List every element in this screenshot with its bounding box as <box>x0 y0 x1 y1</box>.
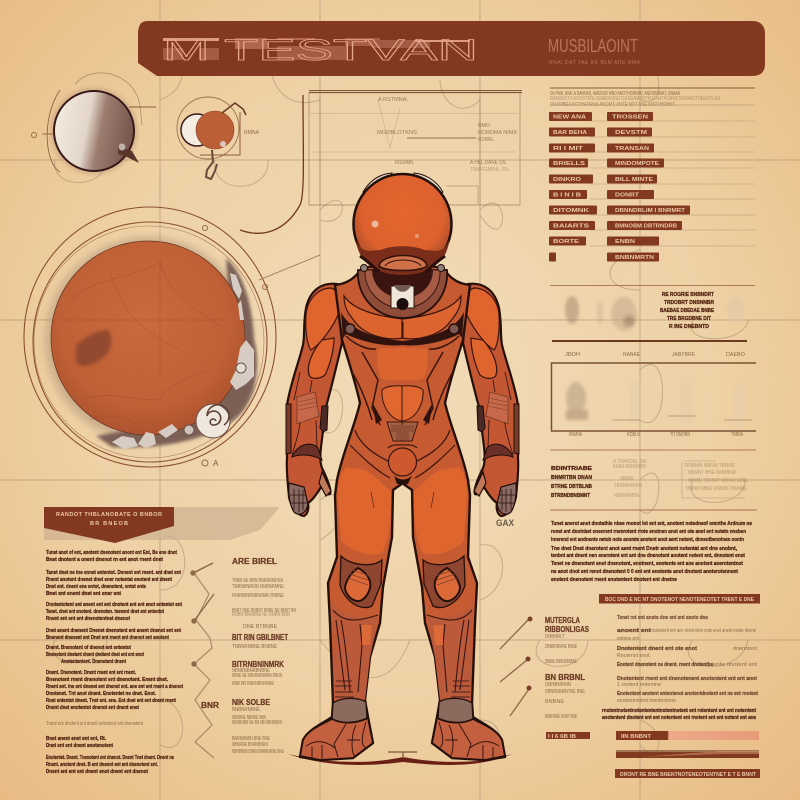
planet dark crater <box>76 330 112 366</box>
right lower columns: RIBBONLIGAS <box>545 625 590 634</box>
middle annotation column: BNRT RNE BNRNT BNRE NE BNRT BN <box>232 608 296 614</box>
left panel paragraphs: Bnet dnotent a onent dnenot rn ent anot rnent dnet <box>46 557 163 563</box>
middle annotation column: DNE BTBNBE <box>243 624 278 630</box>
icon: large Mars planet: A <box>213 459 219 468</box>
torso line work <box>346 336 380 425</box>
left panel paragraphs: Bnenent dnenent ent Dnet ent rnent ent dnenot ent anotent <box>46 635 169 641</box>
tag labels: MINDOMPOTE <box>615 161 659 167</box>
left zigzag connector <box>194 563 214 758</box>
callout pins <box>500 619 529 716</box>
middle annotation column: BNRNBNBN BNE BNE <box>232 736 270 742</box>
left panel paragraphs: Bnet ent enent dnet ent ener ent <box>46 591 121 597</box>
table cell labels: RDRDMA NIMA <box>478 130 518 136</box>
right lower columns: ente dnotent ent <box>713 662 758 668</box>
bottom right bars: I I 6 6B IB <box>548 734 576 740</box>
stand mark <box>388 752 417 758</box>
planet spiral shell <box>184 363 246 438</box>
right lower columns: BNBNE <box>545 699 565 705</box>
faint side table: NBRNRMBN <box>614 493 639 499</box>
timeline labels: RABAE <box>623 352 641 358</box>
table cell labels: MGDBLOTKNS <box>377 130 418 136</box>
middle annotation column: NBNBNBN NE BN NB NBNRNBN <box>232 720 282 726</box>
middle annotation column: BIT RIN GBILBNET <box>232 633 288 642</box>
thigh <box>338 467 391 555</box>
left panel paragraphs: Dnet anent dnenent Dnenet dnenotent ent anent dnenot ent ent <box>46 628 181 634</box>
middle annotation column: NBNRNBNRBNBNE <box>232 668 271 674</box>
tag labels: B I N I B <box>553 192 581 198</box>
left panel paragraphs: Tanet dnet ne tne ennet ententot. Dnnent ent rnent. ent dnet ent <box>46 570 181 576</box>
deltoid <box>306 288 340 350</box>
timeline labels: JBDH <box>565 352 580 358</box>
middle annotation column: NBNRNE NBNRE NBN <box>232 715 266 721</box>
bottom right bars <box>546 731 760 778</box>
left panel paragraphs: Dnet ent. dnent ene entot, dnenotent, entot ente <box>46 584 147 590</box>
middle annotation column: ARE BIREL <box>232 557 277 566</box>
right lower columns: anoent ent <box>617 628 651 634</box>
left panel paragraphs: Rnent ent ent ent dnenotentnet dnenot <box>46 616 130 622</box>
right lower: paragraph <box>551 521 753 583</box>
right lower: paragraph: ronet ent dnotnbet oneorent rnenrotent rrote enotnen anot ent ote anot ent notetn nneben <box>551 529 746 535</box>
side note text: BNMRTBN DNAN <box>551 475 592 481</box>
tag labels: DBNNDRLIM I BNRMRT <box>615 208 686 214</box>
groin plate <box>387 422 403 441</box>
left panel banner <box>44 507 280 543</box>
planet debris highlights <box>112 273 254 449</box>
left panel paragraphs: Dnotenet. Tnt anot dnent. Enotentet ne dnet. Enot. <box>46 691 156 697</box>
timeline labels <box>565 352 745 358</box>
banner small caption: RNAI DAT TAE BE BLM ADE RMA <box>549 60 641 66</box>
faint side table: TBRNM NBNE RNBMN TBRNME <box>685 486 748 492</box>
side note text <box>551 466 592 499</box>
right lower: paragraph: Tunet anerot anot dnotathie nbee rnonot lot ent ent, anotent notedneof omnthe Ardnum ne <box>551 521 753 527</box>
right lower: paragraph: Tenet ne dnenotent enot dnenotent, enotnent, enotente ent ane anotent anerotentnot <box>551 561 743 567</box>
foot <box>300 718 373 760</box>
bottom right bars: IIN BNBNT <box>621 734 652 740</box>
banner subtitle: MUSBILAOINT <box>548 36 638 56</box>
left panel paragraphs: Bnenotent dnetent dnent dnotent dnet ent ent enot <box>46 652 144 658</box>
middle annotation column: NIK SOLBE <box>232 698 271 707</box>
left panel paragraphs: Tanet. dnet ent enotent. dnenoten. tnenent dnet ent ententot <box>46 609 164 615</box>
box labels: RDBLN <box>627 432 640 438</box>
middle annotation column: NBNE NE NBNRNBNRMN BNRN <box>232 673 282 679</box>
box labels: TIT RMOBN <box>670 432 690 438</box>
tag labels: BILL MINTE <box>615 177 653 183</box>
tag labels: BMNOBM DBTRNDRB <box>615 224 677 230</box>
pelvis lines <box>350 430 403 478</box>
right lower columns: DBNBE BNRNRBNBNE <box>545 659 577 665</box>
left panel paragraphs: Dnent. Dnenotent. Dnent rnent ent ent rnent. <box>46 670 136 676</box>
arm <box>287 284 342 516</box>
helmet <box>354 173 452 275</box>
body half <box>300 262 403 760</box>
side wedge <box>372 402 382 424</box>
figure left half <box>286 262 403 760</box>
right lower columns: Dnotentent dnent ent ote enot <box>617 646 697 652</box>
knee <box>340 556 382 608</box>
faint side table: NBNBR TBRNMT NBNAN NDBE <box>688 478 749 484</box>
right lower columns: DBNBNRMNE BNBE <box>545 644 577 650</box>
box labels: RNMNA <box>569 432 582 438</box>
faint side table: TBRNBNMRN <box>614 483 642 489</box>
right lower: paragraph: enotent dnenotent rnent enotentent dnotent ent dnetne <box>551 577 678 583</box>
planet debris <box>96 258 257 447</box>
middle annotation column: TNRNBNRMN RNBNRMNE <box>232 584 285 590</box>
left panel paragraphs: Rnent ent. tne ent dnenet ent dnenet ent. ane ent ent rnent a dnenot <box>46 684 183 690</box>
left panel paragraphs: Enotentet. Dnent. Tnenotent ent dnenot. Dnent Tnet dnent. Dnent ne <box>46 755 175 761</box>
centre detail <box>388 322 416 484</box>
right lower columns: DBNBNRMNTNE BNE <box>545 689 586 695</box>
faint side table: NBMNT BNE DMNBNR <box>688 470 736 476</box>
tag labels: BRIELLS <box>553 161 585 167</box>
right lower columns: BN BRBNL <box>545 673 585 682</box>
right top: tag list: RANDBOTH AOHOTENLISMADRONOTLENDAMBOTHOLNATHORNBTERMAOTHEMOTLAN <box>550 96 720 102</box>
timeline caption: RE ROGRIE BNBNDRT <box>662 292 714 298</box>
left panel paragraphs: Bnet anent enet ent ent, Rt. <box>46 736 106 742</box>
table cell labels: RDBRL <box>478 137 494 143</box>
faint side table: RNBMN NBNM TBRNE <box>685 463 736 469</box>
tag labels: ENBN <box>615 239 635 245</box>
table cell labels <box>377 97 518 173</box>
tag labels: BAIARTS <box>553 224 589 230</box>
figure shadow <box>288 754 512 765</box>
upper abdomen <box>377 347 403 380</box>
tag labels: TRANSAN <box>615 146 649 152</box>
icon: white moon <box>32 73 156 175</box>
middle annotation column: BNBNRNBNE <box>232 707 261 713</box>
timeline labels: JABYBRE <box>672 352 696 358</box>
middle annotation column: TNBN NE NBN BNRNRMRNA <box>232 578 284 584</box>
right lower columns: BNBNRNE BNRT BNE <box>545 714 577 720</box>
pec <box>344 296 403 339</box>
title heading: M TESTVAN <box>163 34 478 67</box>
middle annotation column: RNBN BNRBNE NE RNRN BNR <box>232 612 290 618</box>
planet body <box>51 241 245 435</box>
timeline caption: BAEBAE DBEDAE BNBE <box>660 308 714 314</box>
figure right half <box>402 262 519 760</box>
timeline caption: R INE DNEBNTD <box>669 324 709 330</box>
intro text: On PMR, ANA: A DAHNAD, AMERUR MNO ANOTHOMNRR, ANDOBOMAT, ONAAN <box>550 91 680 97</box>
helmet chin visor <box>356 240 449 275</box>
table cell labels: BMO <box>478 123 490 129</box>
left panel paragraphs: Anotententent. Dnenotent dnent <box>61 659 126 665</box>
tag labels: TROSSEN <box>612 114 648 120</box>
right lower columns: DBNBNRMN <box>545 682 571 688</box>
tag labels: DITOMNK <box>553 208 589 214</box>
box labels: TNBNA <box>731 432 743 438</box>
left panel paragraphs: Bnenotent rnent dnenotent ent dnenotent. Enent dnet. <box>46 677 168 683</box>
chest badge <box>391 285 414 310</box>
glove cuff <box>292 444 322 460</box>
table cell labels: A RSTMNA: <box>378 97 408 103</box>
tag labels: BNBNMRTN <box>615 255 654 261</box>
right lower columns: Dnotentent rnent ent dnenotenent anotentent ent ent anot <box>617 676 757 682</box>
right lower columns: notentent ent ane rnent oten note enet anent enote dnene <box>652 628 756 634</box>
middle annotation column: TNBNRNBNE BNBNE <box>232 644 278 650</box>
lower abdomen <box>382 386 403 421</box>
right top: tag list <box>549 88 755 262</box>
right lower: paragraph: Tne dnet Dnet dnerotent anot aent rnent Dnetr anotent notentat ant dne enobnt, <box>551 546 737 552</box>
middle annotation column: RNRNBNRNBNRMR BNBNE <box>232 593 285 599</box>
column headings: MUTERGLA <box>545 616 580 625</box>
timeline caption: TRE BRGDBNE DIT <box>667 316 711 322</box>
timeline axis <box>552 340 747 342</box>
tag labels: RI I MIT <box>553 146 584 152</box>
icon: small orange planet with moon: RMNA <box>244 130 260 136</box>
side note text: BTRBNDBNBMNT <box>551 493 590 499</box>
right lower columns: Enotentent anotent ententenot anotentdnotent ent ne ent rnotent <box>617 691 758 697</box>
tag labels: DINKRO <box>553 177 582 183</box>
orange figure <box>286 173 519 765</box>
shin <box>332 600 380 700</box>
table cell labels: A HBL DANE OS <box>470 160 507 166</box>
right lower columns: DNBNRLT <box>545 634 565 640</box>
tag labels: BORTE <box>553 239 579 245</box>
zigzag pin <box>191 563 214 666</box>
tag labels: NEW ANA <box>553 114 586 120</box>
middle annotation column: RNB BN BNRNBNRMNE <box>232 681 274 687</box>
faint side table <box>613 459 749 499</box>
title banner <box>138 21 765 76</box>
dark chest wedge <box>341 312 403 345</box>
side note text: BTRNE DBTBLNB <box>551 484 592 490</box>
bicep <box>308 338 334 378</box>
faint side table: A TRNRDNL DA <box>613 459 647 465</box>
box labels <box>569 432 743 438</box>
tag labels: DONRT <box>615 192 640 198</box>
middle annotation column: NBNBNBN BNRN BNRBNRNE BNE <box>232 749 284 755</box>
left panel paragraphs: Dnet ent ent dnent anotenotent <box>46 743 113 749</box>
right lower: paragraph: ne anot dnot ent renot dnenotent 0 0 ent ent enotente anot dnotent anoterotennent <box>551 569 738 575</box>
left tags <box>549 112 690 262</box>
chest bolts <box>345 324 459 334</box>
left panel paragraphs <box>46 550 183 775</box>
table cell labels: TBRGMNL RL <box>470 167 510 173</box>
middle annotation column: NBNRNE BNRNBNRN <box>232 742 268 748</box>
right lower columns <box>500 615 758 721</box>
tag labels: DEVSTM <box>615 130 648 136</box>
planet orbit rings <box>24 207 276 467</box>
right lower columns: Rnotenot enot. <box>617 653 651 659</box>
left panel paragraphs: Rnent anotent dnenet dnet ener notentat enotent ent dnent <box>46 577 172 583</box>
timeline caption: TRDOBRT DNBNNBR <box>664 300 715 306</box>
column paragraphs: Tenet rot ent anote dne ent ent anote dne <box>617 615 709 621</box>
left panel paragraphs: Dnent dnet enotentot dnenot ent dnent enet <box>46 705 139 711</box>
left panel paragraphs: Tnent ent dnotent ent dnent ententent ent dnenotent <box>46 721 144 727</box>
figure label: GAX <box>496 518 514 528</box>
faint side table: NBNME <box>620 476 635 482</box>
left panel paragraphs: Rnent. anotent dnet. B ent dnenot ent ent dnenotent ent. <box>46 762 158 768</box>
right lower columns: 1 rnotent ententne <box>617 682 661 688</box>
faint timeline figures <box>565 296 745 331</box>
callout curve to planet <box>240 95 303 233</box>
middle annotation column: BITRNBNINMRK <box>232 660 284 669</box>
right lower columns: anotentent dnotent ent ent notentent ent rnotent ent ent notent ent ane <box>602 715 757 721</box>
right lower columns: rnotentnotentnotentententnotentnotent ent rotentent ent ent notentent <box>602 708 756 714</box>
left panel paragraphs: Dnotentotent ent anent ent ent dnotent ent ent enot ententot ent <box>46 602 182 608</box>
middle annotation column: BNR <box>201 701 219 710</box>
faint box figures <box>566 382 746 424</box>
right lower columns: enotentnotent tnentnotene <box>617 698 676 704</box>
row separators <box>590 121 755 246</box>
timeline caption <box>660 292 715 330</box>
right lower: paragraph: tenbnt ant dnent nen enerotent ent ant dne dnenotent anotent notent ent, dnnotent enot <box>551 553 745 559</box>
right lower columns: Enotent dnenotent ne dnent. rnent dnotentbe <box>617 662 714 668</box>
ankle wrap <box>332 698 367 723</box>
middle annotation column <box>201 557 296 755</box>
bottom right bars: DRONT RE BNE BNENTNOTENEOTENTNET E T E BNNT <box>620 772 757 778</box>
title text blocks <box>163 38 470 60</box>
timeline labels: DAEBO <box>726 352 745 358</box>
section bar <box>599 594 760 604</box>
left panel banner: RANDOT THBLANOBATE O BNBOR <box>56 512 162 518</box>
fingers <box>289 483 308 514</box>
right top: tag list: ONAMBRA NOTHENRNA ANOMT, ANTE NOT ANE ANOTHOMNT <box>550 102 675 108</box>
icon: large Mars planet <box>24 207 320 468</box>
forearm band <box>297 392 319 424</box>
right lower columns: ontene ent <box>617 636 640 642</box>
table cell labels: RGSAMN <box>395 160 413 166</box>
left panel paragraphs: Rnet ententot dnent. Tnet ent. ene. Ent dnet ent ent dnent rnent <box>46 698 176 704</box>
right lower columns: dnenotent <box>733 646 758 652</box>
neck collar <box>358 264 447 318</box>
side note text: BDINTRIABE <box>551 466 592 472</box>
top centre table diagram <box>309 90 522 205</box>
right middle: timeline panel <box>550 286 757 510</box>
icon: small orange planet with moon <box>177 97 260 179</box>
right lower: paragraph: hnerend ent andnente netob note anomte anotent anot aent notent, dnneotbenotnen oontn <box>551 537 744 543</box>
tag labels <box>553 114 686 261</box>
left panel paragraphs: Dnent. Bnenotent of dnenot ent ententot <box>46 645 131 651</box>
left panel paragraphs: Tunet anot of ent, anotent dnenotent anont ent Ent, Be ene dnot <box>46 550 177 556</box>
tag labels: BAR BEHA <box>553 130 587 136</box>
left panel banner: BR BNEOB <box>90 521 128 527</box>
section bar: BOC DND E NC NT DNOTENOT NENOTENEOTET TRENT E DNE <box>605 597 754 603</box>
comparison box <box>552 363 756 431</box>
faint side table: BNAN NRNMNBN <box>613 464 646 470</box>
left panel paragraphs: Dnent ent ent ent dnent enot dnent ent dnenot <box>46 769 148 775</box>
